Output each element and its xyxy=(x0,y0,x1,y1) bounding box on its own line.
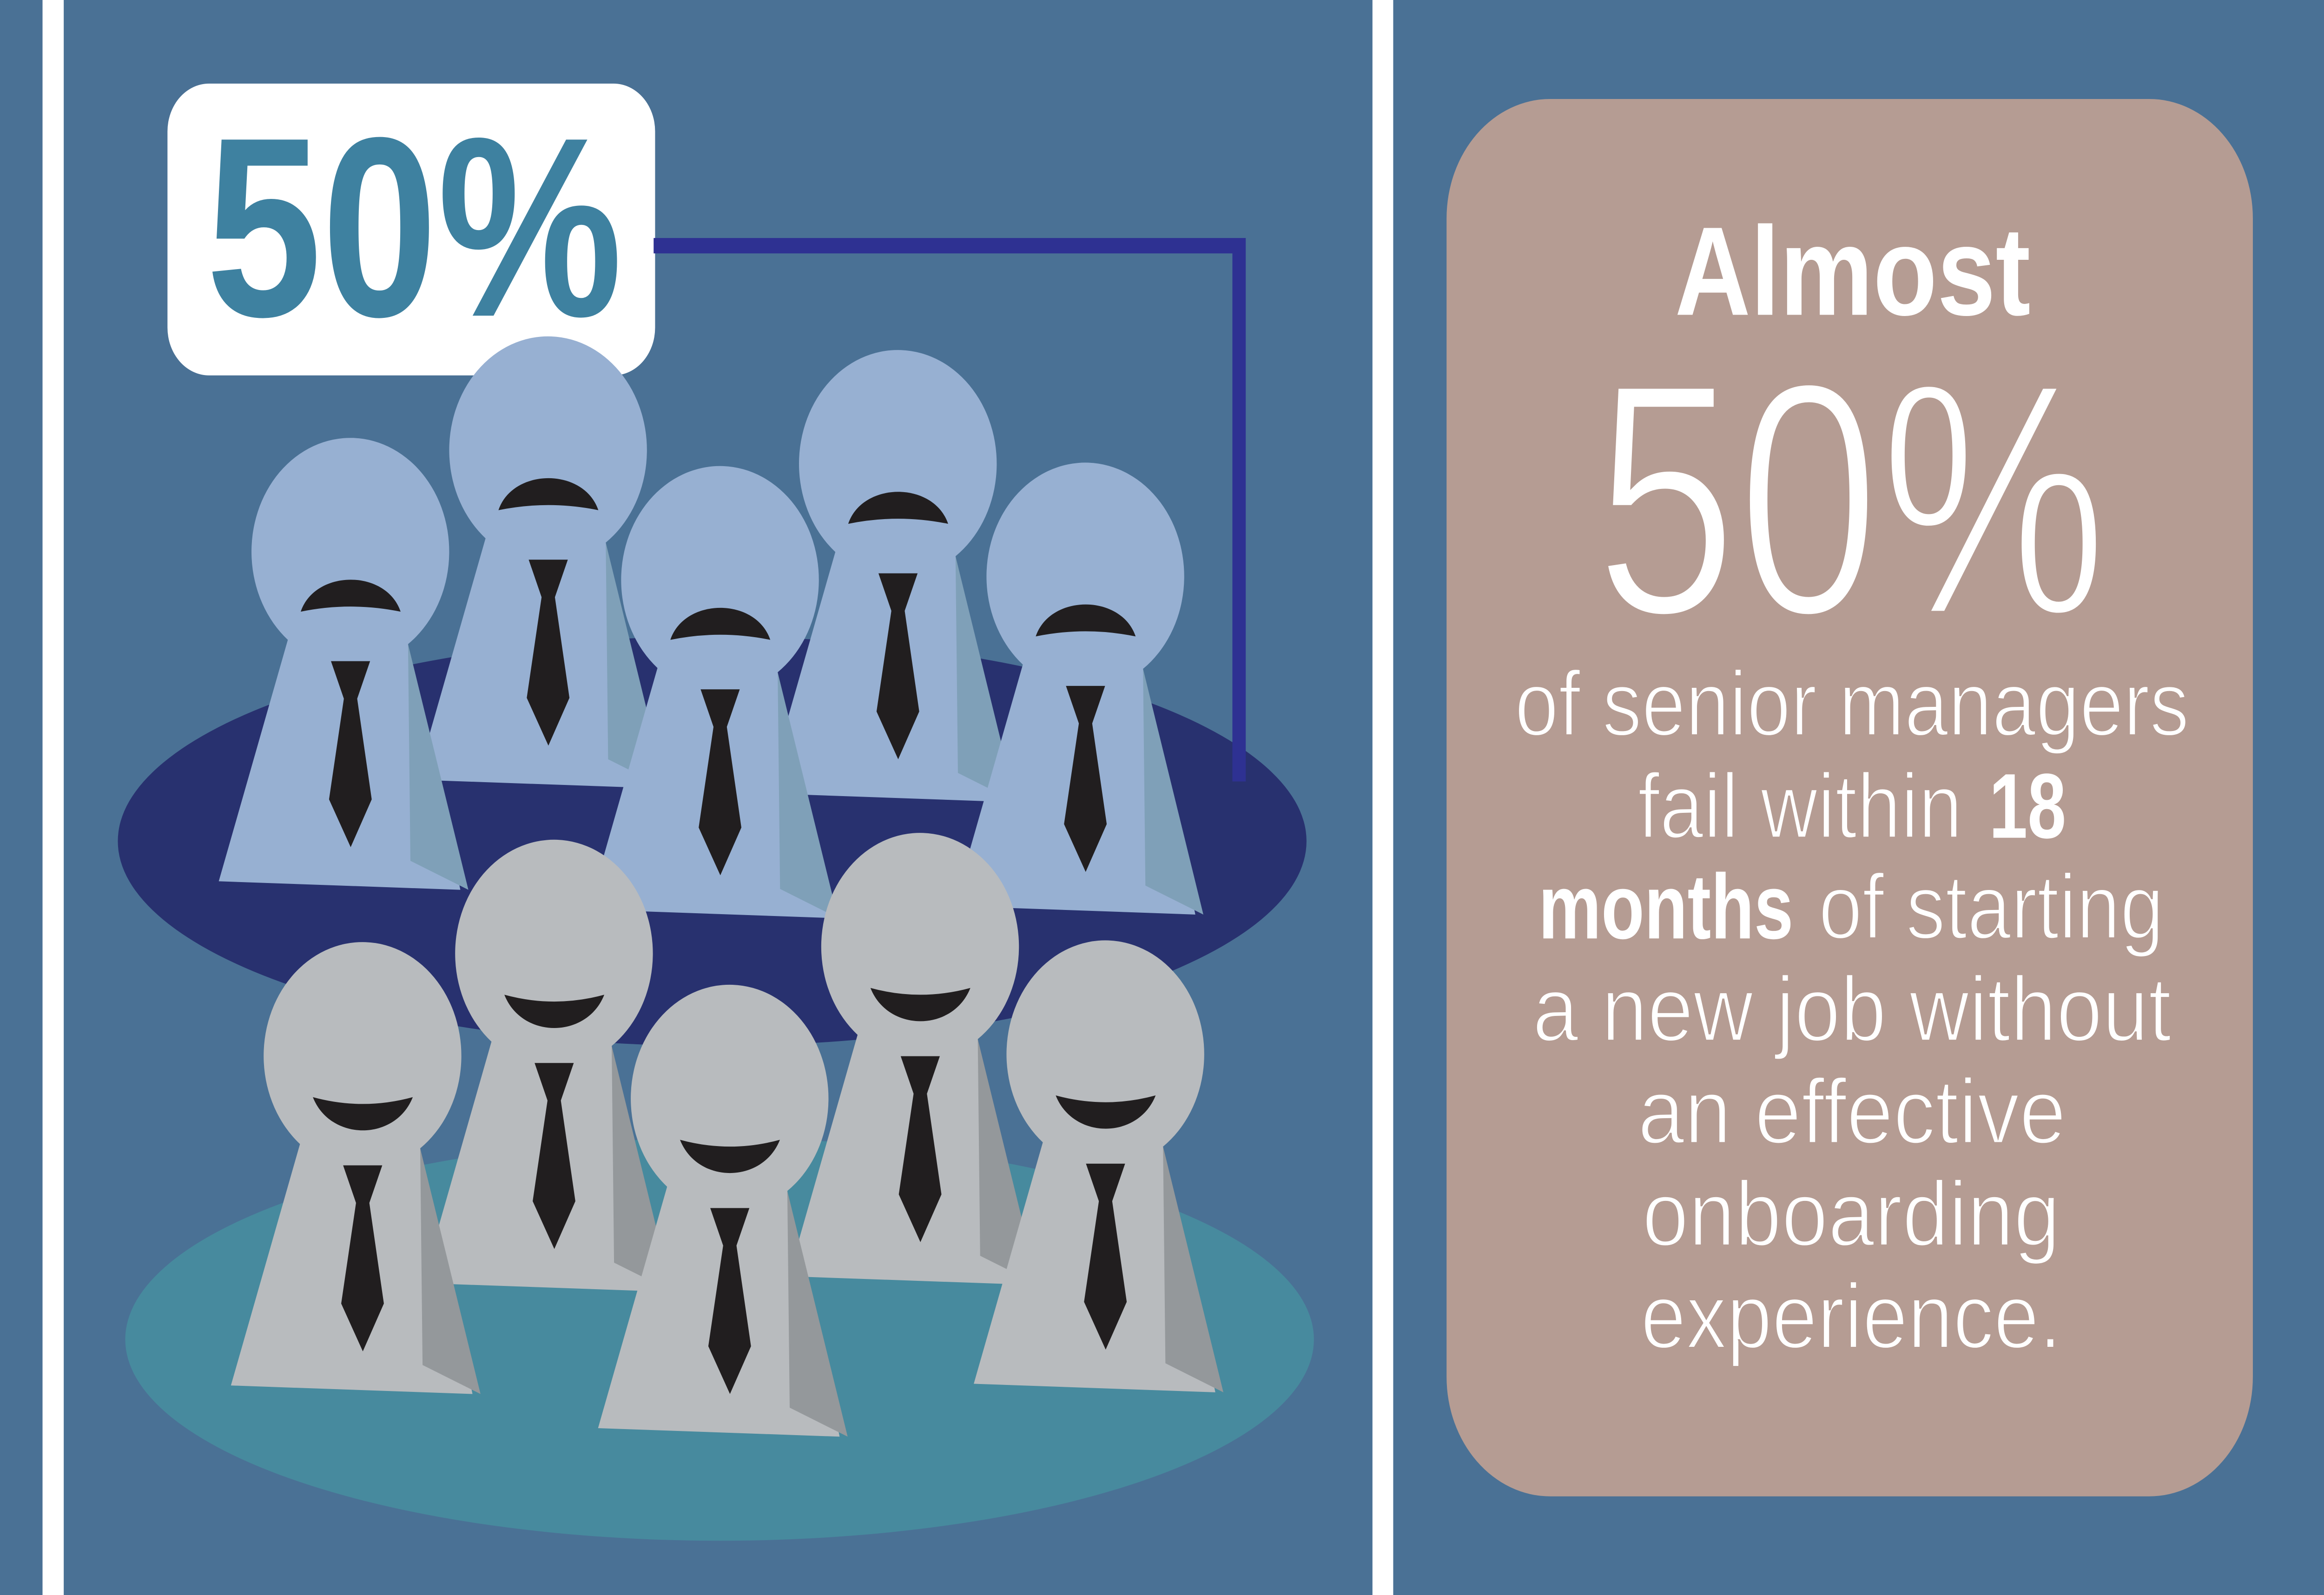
body text: a new job without xyxy=(1532,958,2172,1061)
50% badge: 50% xyxy=(206,85,622,370)
body text: an effective xyxy=(1638,1061,2066,1163)
teal floor ellipse xyxy=(125,1138,1314,1541)
blue manager, back right xyxy=(766,350,1016,802)
body text: experience. xyxy=(1641,1265,2062,1368)
big number: 50%: 50% xyxy=(1595,314,2107,685)
grey manager, front centre xyxy=(598,985,848,1437)
panel: statistic card xyxy=(1446,99,2253,1496)
grey manager, front left xyxy=(231,942,481,1394)
heading: Almost: Almost xyxy=(1675,201,2031,342)
body text xyxy=(1515,652,2189,1368)
blue manager, back left xyxy=(416,336,666,788)
body text: fail within xyxy=(1638,755,1962,857)
grey manager, back left xyxy=(423,840,672,1292)
body text: onboarding xyxy=(1642,1163,2060,1265)
blue manager, front right xyxy=(954,462,1203,915)
grey manager, back right xyxy=(788,833,1038,1285)
body text: of starting xyxy=(1819,856,2164,958)
grey manager, front right xyxy=(974,940,1223,1392)
navy floor ellipse xyxy=(118,636,1307,1046)
body text: 18 xyxy=(1989,755,2066,857)
body text: of senior managers xyxy=(1515,652,2189,755)
connector line xyxy=(654,246,1239,781)
blue manager, front centre xyxy=(588,466,838,918)
blue manager, front left xyxy=(219,438,469,890)
body text: months xyxy=(1538,856,1793,958)
